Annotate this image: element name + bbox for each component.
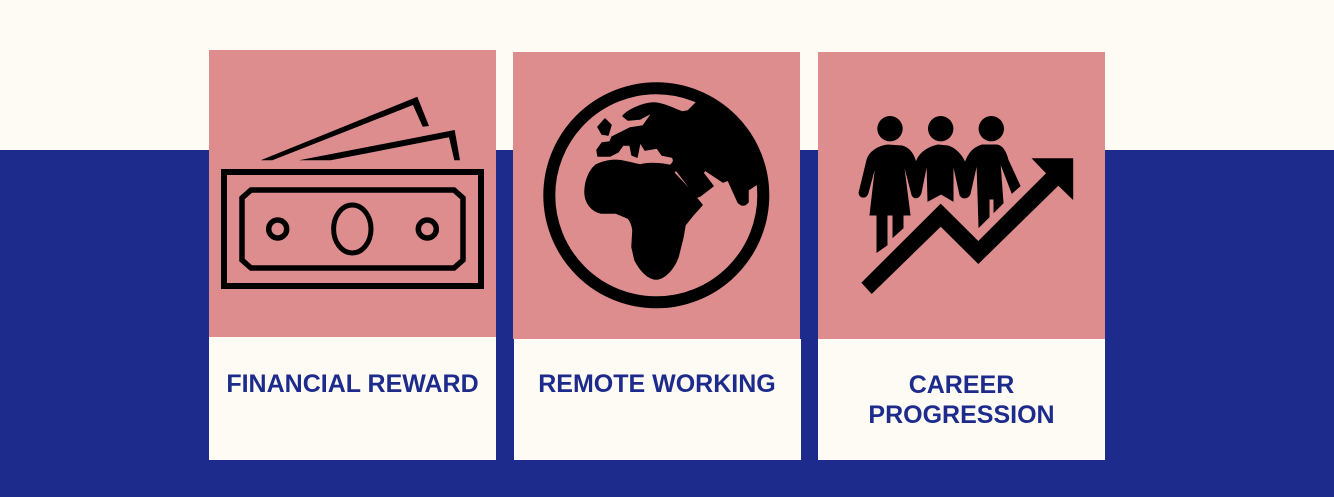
panel: financial reward (209, 50, 496, 460)
icon tile (818, 52, 1105, 339)
heading: remote working: REMOTE WORKING (538, 370, 776, 398)
card base (514, 339, 801, 460)
panel: career progression (818, 52, 1105, 460)
icon: globe (549, 88, 763, 302)
icon: people and rising arrow (859, 116, 1073, 293)
icon tile (209, 50, 496, 337)
background: blue band (0, 150, 1334, 497)
background: cream band (0, 0, 1334, 150)
icon: banknotes (224, 97, 481, 286)
panel: remote working (513, 52, 801, 460)
card base (818, 339, 1105, 460)
icon tile (513, 52, 800, 339)
heading: career progression: CAREER (909, 371, 1014, 399)
heading: financial reward: FINANCIAL REWARD (226, 370, 479, 398)
heading: career progression: PROGRESSION (868, 401, 1055, 429)
card base (209, 337, 496, 460)
